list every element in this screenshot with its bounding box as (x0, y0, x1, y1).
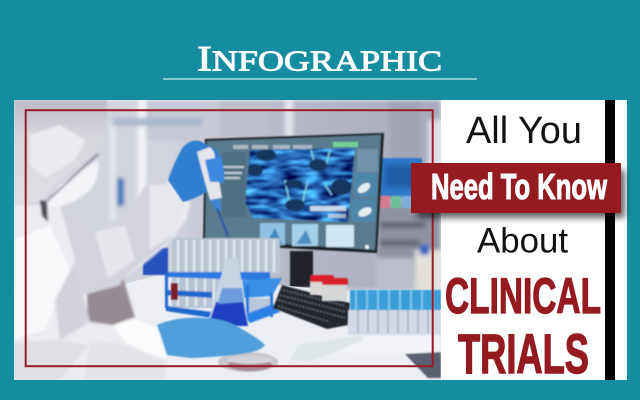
keyboard (273, 285, 350, 329)
gloved hand with pipette (168, 141, 228, 236)
main monitor (203, 133, 384, 287)
blue bottle behind rack (143, 248, 168, 275)
title: Infographic (197, 34, 442, 80)
photo: scientist in a laboratory (14, 100, 441, 380)
red photo frame (26, 110, 433, 366)
white title panel (441, 100, 627, 380)
blue capped tube box (346, 290, 441, 378)
gloved hand at bench (157, 318, 265, 358)
scientist in protective suit (14, 100, 190, 380)
text: About: About (477, 222, 568, 260)
test tube rack (165, 238, 282, 323)
black vertical bar (605, 100, 615, 380)
desk (124, 272, 310, 292)
lab background (14, 100, 441, 292)
petri dish and blurred items (218, 335, 363, 372)
microscope image on screen (245, 148, 357, 224)
red capped sample containers (310, 275, 348, 301)
banner shadow (417, 170, 625, 218)
glass flask (208, 258, 248, 326)
title underline (163, 78, 477, 80)
text: All You: All You (466, 110, 582, 152)
banner: Need To Know (411, 163, 621, 213)
background monitor (380, 158, 422, 208)
